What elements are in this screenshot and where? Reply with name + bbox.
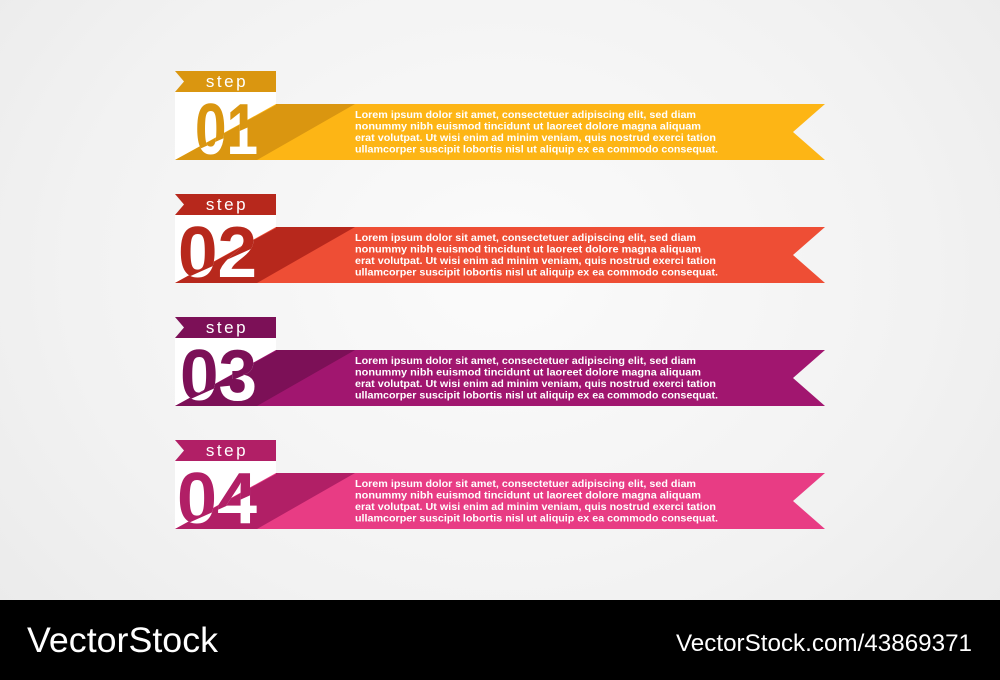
- number 01: 01: [195, 90, 258, 170]
- body text: [355, 478, 718, 524]
- footer url: VectorStock.com/43869371: [676, 630, 972, 657]
- number 03: 03: [180, 336, 257, 416]
- dark diagonal band: [175, 104, 355, 160]
- number 03: 03: [180, 336, 257, 416]
- number 02: 02: [178, 213, 257, 293]
- number 02: 02: [178, 213, 257, 293]
- body text: [355, 355, 718, 402]
- step 02: [175, 194, 825, 283]
- ribbon bar: [175, 473, 825, 529]
- tab: step: step: [206, 318, 248, 337]
- body text: [355, 109, 718, 156]
- number 02: [180, 226, 254, 278]
- step 01: [175, 71, 825, 160]
- tab: step: step: [206, 195, 248, 214]
- ribbon bar: [175, 227, 825, 283]
- number 01: 01: [195, 90, 258, 170]
- tab: step: [175, 440, 276, 461]
- white panel: [175, 461, 276, 529]
- footer bar: [0, 600, 1000, 680]
- number 04: 04: [177, 459, 257, 539]
- tab: step: [175, 317, 276, 338]
- dark diagonal band: [175, 350, 355, 406]
- tab: step: [175, 194, 276, 215]
- ribbon bar: [175, 104, 825, 160]
- tab: step: [175, 71, 276, 92]
- step 04: [175, 440, 825, 529]
- number 04: 04: [177, 459, 257, 539]
- tab: step: step: [206, 441, 248, 460]
- body text: [355, 232, 718, 278]
- dark diagonal band: [175, 227, 355, 283]
- number 01: [197, 103, 256, 154]
- number 03: [182, 349, 254, 401]
- footer logo: VectorStock: [27, 621, 219, 660]
- number 04: [180, 472, 257, 524]
- tab: step: step: [206, 72, 248, 91]
- step 03: [175, 317, 825, 406]
- white panel: [175, 338, 276, 406]
- dark diagonal band: [175, 473, 355, 529]
- white panel: [175, 92, 276, 160]
- white panel: [175, 215, 276, 283]
- ribbon bar: [175, 350, 825, 406]
